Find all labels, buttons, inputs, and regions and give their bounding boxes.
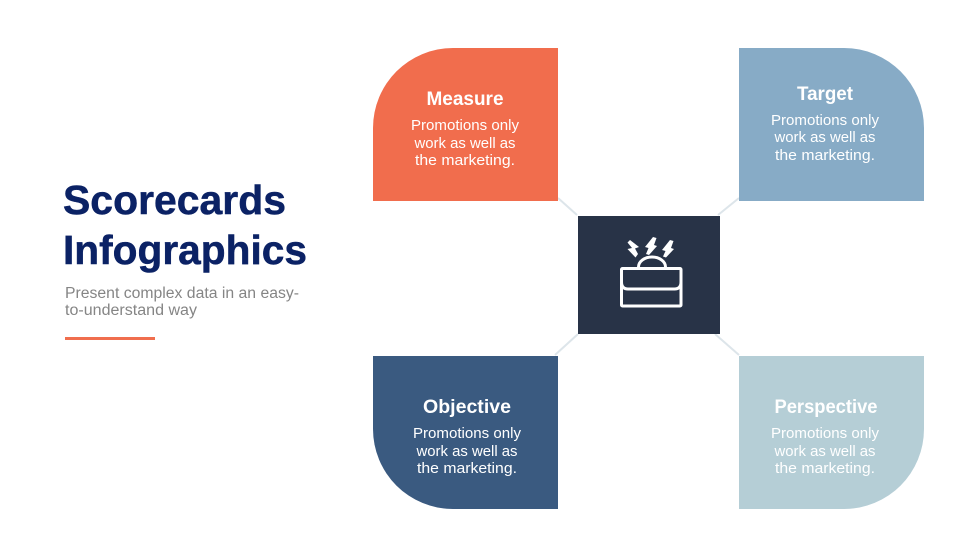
panel: perspective xyxy=(739,356,924,509)
panel: measure: the marketing. xyxy=(415,152,515,169)
panel: perspective: work as well as xyxy=(774,443,876,460)
panel: target: work as well as xyxy=(774,129,876,146)
panel: perspective: the marketing. xyxy=(775,460,875,477)
title: Infographics xyxy=(63,227,307,273)
panel: objective: Objective xyxy=(423,396,511,418)
subtitle: Present complex data in an easy- xyxy=(65,285,299,302)
panel: target: Promotions only xyxy=(771,112,879,129)
panel: target xyxy=(739,48,924,201)
icon: briefcase with lightning bolts xyxy=(622,237,681,306)
panel: measure: work as well as xyxy=(414,135,516,152)
title xyxy=(63,177,307,273)
panel: target: Target xyxy=(797,83,853,105)
panel: objective xyxy=(373,356,558,509)
center square xyxy=(578,216,720,334)
subtitle xyxy=(65,285,299,319)
accent rule xyxy=(65,337,155,340)
connector lines xyxy=(555,198,739,355)
panel: objective: work as well as xyxy=(416,443,518,460)
panel: target: the marketing. xyxy=(775,147,875,164)
title: Scorecards xyxy=(63,177,286,223)
panel: objective: Promotions only xyxy=(413,425,521,442)
panel: objective: the marketing. xyxy=(417,460,517,477)
panel: perspective: Perspective xyxy=(774,396,878,418)
subtitle: to-understand way xyxy=(65,302,197,319)
panel: measure: Promotions only xyxy=(411,117,519,134)
panel: measure xyxy=(373,48,558,201)
panel: measure: Measure xyxy=(426,88,504,110)
panel: perspective: Promotions only xyxy=(771,425,879,442)
